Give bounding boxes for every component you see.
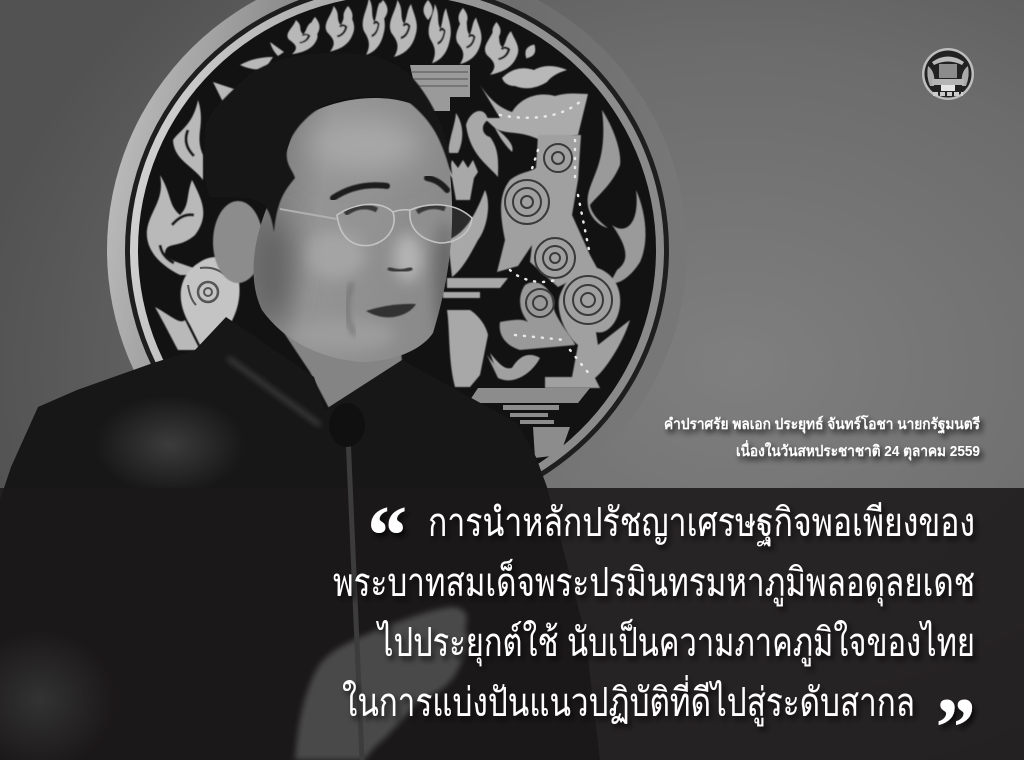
caption: speaker and occasion: เนื่องในวันสหประชาชาติ 24 ตุลาคม 2559 (736, 440, 980, 461)
lion (480, 85, 646, 388)
jacket (0, 317, 600, 760)
caption: speaker and occasion: คำปราศรัย พลเอก ประยุทธ์ จันทร์โอชา นายกรัฐมนตรี (664, 414, 981, 434)
lion front leg (500, 282, 575, 350)
opening quotation mark: “ (363, 489, 406, 583)
centre ornaments right of the head (443, 111, 538, 387)
lion mane (480, 85, 588, 152)
jacket sheen (95, 395, 245, 495)
caption: speaker and occasion (664, 414, 981, 461)
microphone head (329, 403, 365, 447)
left ball ornament (181, 257, 240, 345)
emblem: large state seal (107, 0, 687, 536)
hair (204, 53, 452, 232)
quote panel (0, 488, 1024, 760)
small seal logo (922, 48, 974, 100)
stripes box behind head (410, 65, 470, 111)
flame ornaments along the top (213, 0, 567, 102)
lion scroll base (487, 355, 540, 380)
microphone stem (348, 435, 362, 760)
lion platform (468, 388, 590, 458)
nose and mouth (388, 268, 412, 271)
figure seen through the panel (0, 403, 467, 760)
seal rings (107, 0, 687, 536)
lion haunch (545, 266, 630, 388)
collar fold highlight (228, 358, 320, 425)
man: portrait (0, 53, 600, 760)
ear (213, 201, 263, 283)
lion body patterns (505, 144, 612, 324)
lion sparkle dots (500, 100, 590, 375)
glasses (280, 204, 472, 246)
lion neck and torso (497, 135, 597, 287)
hand (295, 607, 467, 760)
left scroll ornaments (147, 100, 205, 350)
neck (262, 300, 402, 410)
eyebrows (333, 178, 447, 198)
face shading (252, 119, 455, 351)
eyes (345, 207, 445, 214)
quote text (333, 489, 975, 760)
face (254, 98, 452, 362)
sleeve sheen (0, 630, 115, 760)
lion tail flames (588, 110, 620, 228)
